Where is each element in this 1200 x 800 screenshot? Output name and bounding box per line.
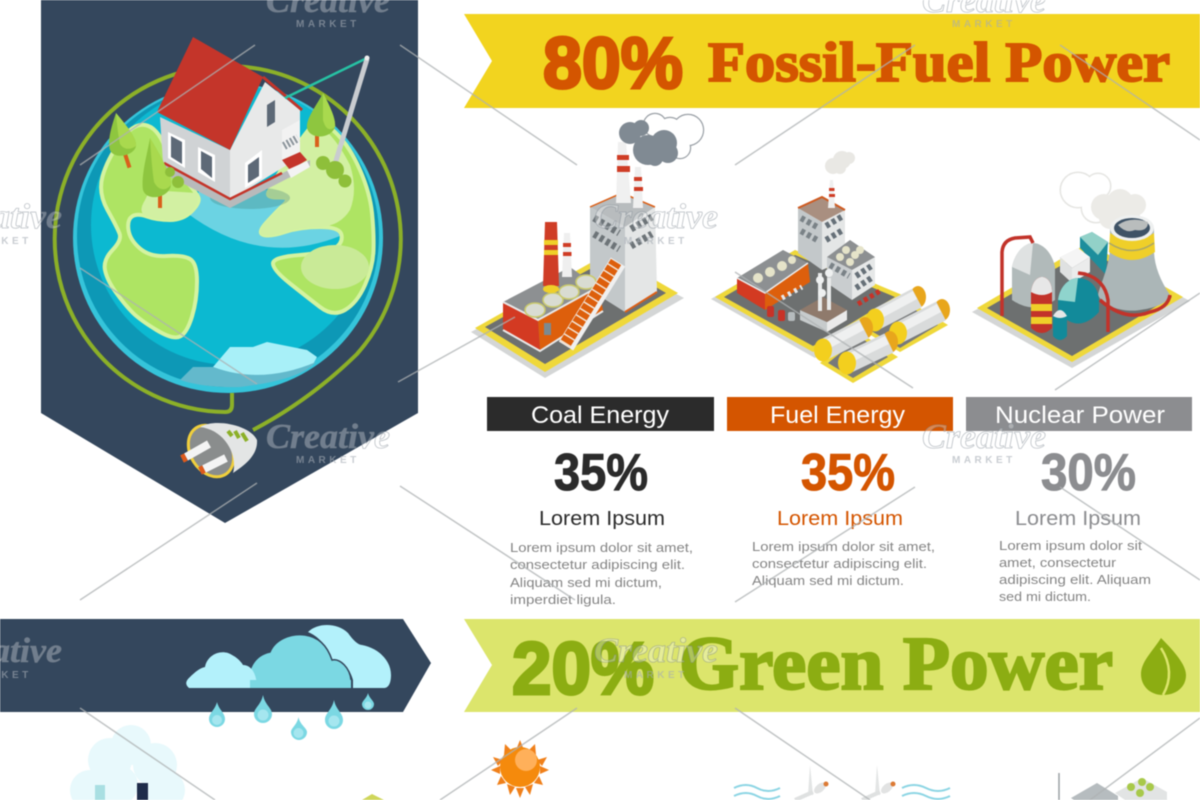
label: coal energy: Coal Energy [531,402,669,429]
icon: nuclear power plant [972,173,1190,368]
watermark: creative market: Creative [594,197,718,236]
watermark: creative market: MARKET [624,670,688,681]
label: nuclear power: Nuclear Power [995,402,1165,429]
text block: coal: consectetur adipiscing elit. [510,557,685,572]
stat: nuclear 30%: 30% [1041,444,1136,502]
windows [168,132,185,168]
heading: 80%: 80% [543,24,683,104]
watermark: creative market: MARKET [952,455,1016,466]
heading: green power: Green Power [679,622,1113,706]
tall block [798,208,822,270]
text block: coal [510,540,693,607]
white box [1060,248,1090,268]
text block: fuel: Lorem ipsum dolor sit amet, [752,539,935,554]
label: fuel energy [727,397,953,431]
text block: fuel: consectetur adipiscing elit. [752,556,927,571]
cooling tower [1098,228,1170,311]
watermark: creative market [0,0,1046,681]
subheading: fuel: Lorem Ipsum [777,508,903,530]
text block: nuclear: adipiscing elit. Aliquam [999,572,1151,587]
roof [157,37,263,150]
icon: cropped steam and chimneys [70,725,185,800]
text block: coal: Aliquam sed mi dictum, [510,575,662,590]
watermark: creative market: MARKET [296,19,360,30]
smoke outline [644,114,703,158]
icon: leaf [1141,638,1186,695]
red pipes [1002,237,1033,316]
watermark: creative market: MARKET [624,236,688,247]
right continent [261,122,374,313]
icon: cropped solar unit [362,794,384,800]
icon: fuel power plant [711,151,950,383]
subheading: nuclear: Lorem Ipsum [1015,508,1141,530]
heading: fossil-fuel power: Fossil-Fuel Power [708,32,1170,94]
watermark: creative market: MARKET [952,19,1016,30]
watermark: creative market: Creative [266,417,390,456]
text block: fuel [752,539,935,588]
icon: wind turbines and waves [734,765,950,800]
text block: nuclear [999,538,1151,604]
stat: fuel 35%: 35% [801,444,895,502]
red plinth [164,163,282,199]
back tank [866,286,926,332]
icon: power cord ring [55,66,401,430]
teal dome [1058,278,1099,324]
banner: fossil-fuel power [464,14,1200,108]
pool with pipes [800,310,827,332]
tall building [590,207,625,312]
text block: coal: imperdiet ligula. [510,592,616,607]
stat: coal 35%: 35% [554,444,648,502]
panel: navy shield [41,0,418,523]
grey smoke [825,151,855,174]
house base [163,160,310,208]
red block [737,278,765,310]
text block: nuclear: amet, consectetur [999,555,1117,570]
white stack [562,233,572,277]
text block: coal: Lorem ipsum dolor sit amet, [510,540,693,555]
barrels [767,287,880,321]
dark smoke [619,120,678,166]
thin chimney [828,180,835,208]
roof tanks [525,275,596,317]
striped tank [1031,277,1052,333]
label: coal energy [487,397,714,431]
conveyor [566,262,618,346]
banner: green power [464,619,1200,712]
icon: cropped green building [1059,773,1167,800]
small teal tank [1053,310,1067,340]
icon: utility pole and cable [285,56,370,164]
gable wall [230,82,300,200]
right tank [889,299,950,344]
left wall [160,117,230,200]
text block: nuclear: sed mi dictum. [999,589,1091,604]
watermark: creative market: MARKET [296,455,360,466]
teal box [1080,232,1108,275]
icon: rain cloud [186,625,391,740]
panel: navy arrow strip [0,619,431,712]
front tank [814,317,873,362]
raindrops [209,693,374,740]
label: nuclear power [966,397,1192,431]
watermark: creative market: Creative [594,631,718,670]
icon: globe [73,83,383,393]
icon: house [157,37,310,209]
icon: coal power plant [471,114,703,378]
icon: sun [491,740,549,798]
subheading: coal: Lorem Ipsum [539,508,665,530]
pale smoke [1091,189,1146,229]
tank platforms [860,299,948,352]
watermark: creative market: Creative [922,417,1046,456]
icon: trees and bushes [109,93,352,208]
porch [282,120,300,162]
red stack [543,222,559,286]
label: fuel energy: Fuel Energy [770,402,905,429]
text block: fuel: Aliquam sed mi dictum. [752,573,904,588]
low building [503,302,540,350]
dome tank [1012,243,1055,308]
heading: 20%: 20% [512,627,654,710]
left continent [101,125,199,337]
tall chimneys [616,142,631,203]
ice cap [213,342,317,376]
text block: nuclear: Lorem ipsum dolor sit [999,538,1142,553]
small block [827,257,852,300]
pale smoke outline [1061,173,1110,222]
near tank [838,331,898,374]
icon: plug [177,415,257,487]
